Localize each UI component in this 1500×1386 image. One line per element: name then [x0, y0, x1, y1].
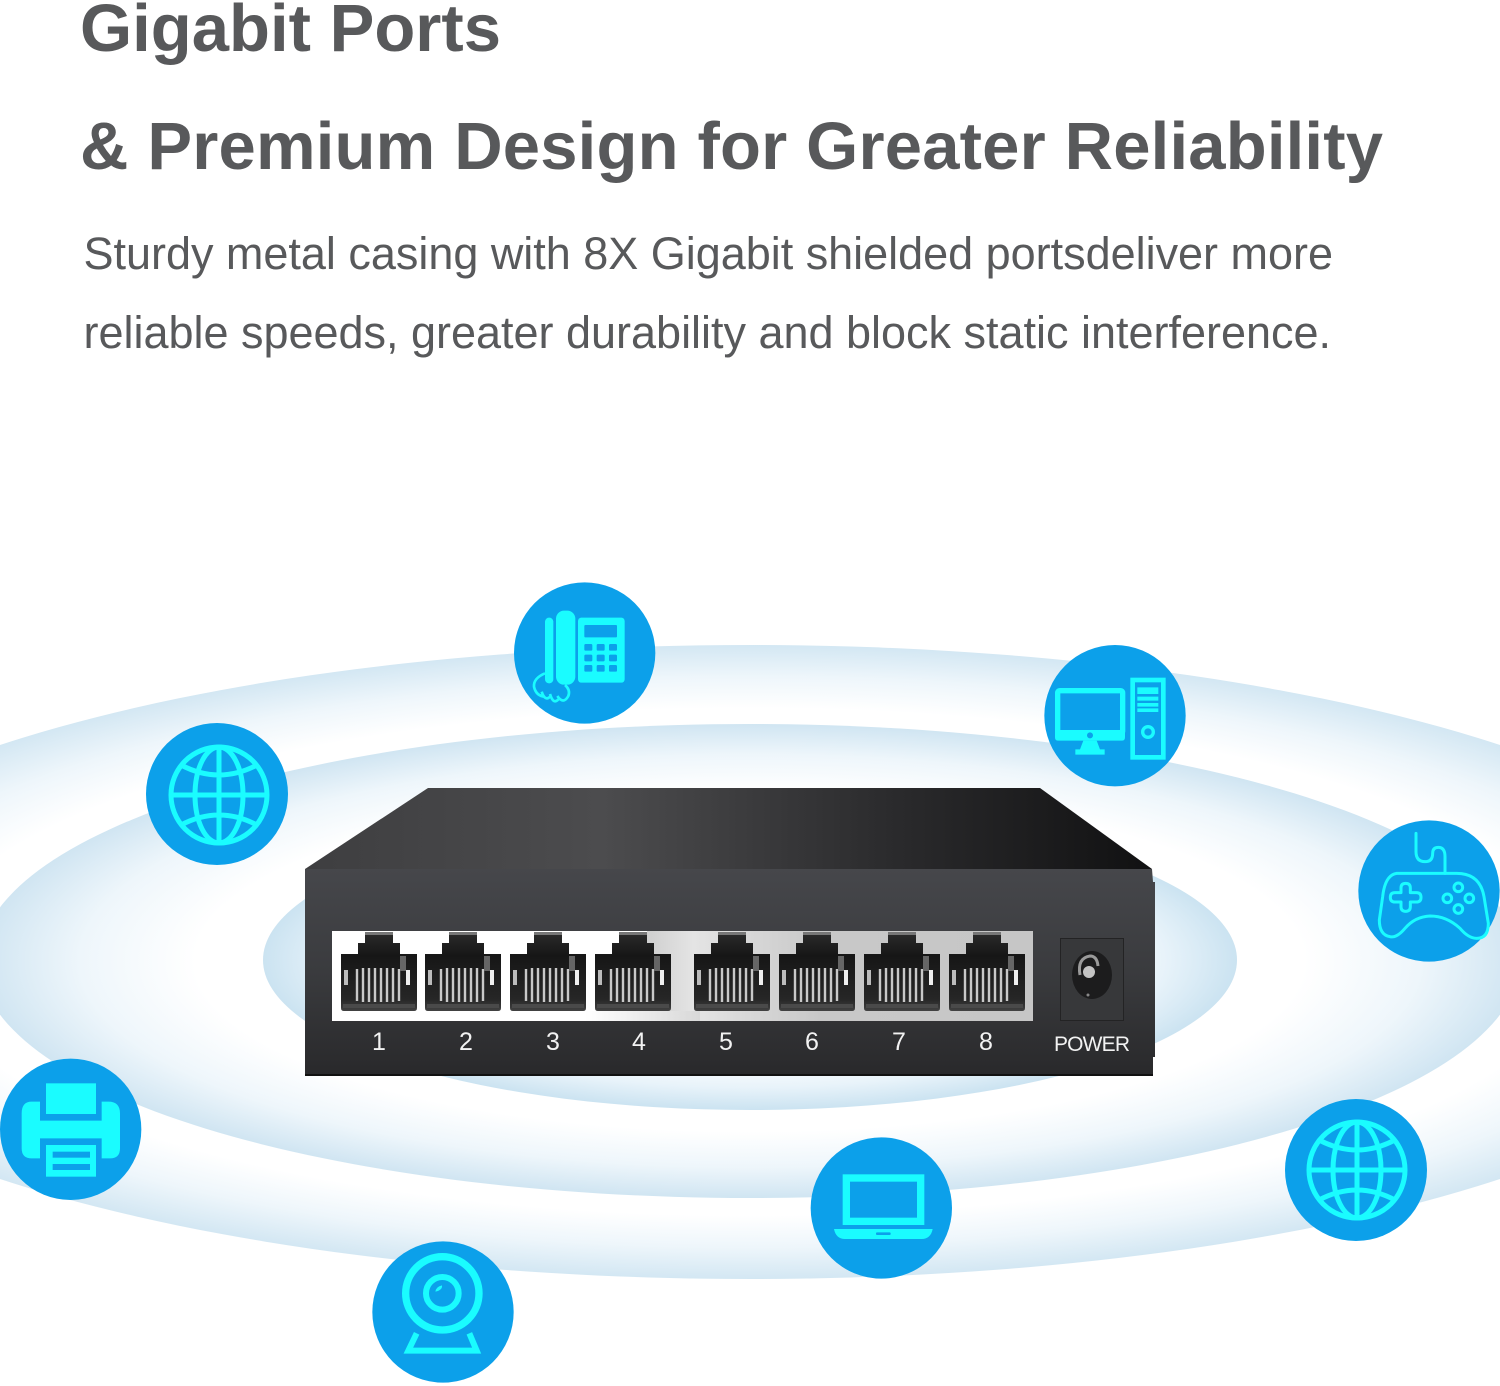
port strip — [332, 931, 1033, 1021]
switch front panel — [305, 869, 1155, 1075]
switch top panel — [305, 788, 1152, 869]
port numbers: 6 — [805, 1028, 819, 1056]
title: & Premium Design for Greater Reliability — [80, 109, 1383, 184]
network switch — [305, 788, 1155, 1076]
icon: game controller — [1358, 820, 1500, 962]
port numbers: 4 — [632, 1028, 646, 1056]
description text — [84, 228, 1333, 358]
icon: laptop — [811, 1137, 952, 1279]
icon: webcam — [372, 1241, 514, 1383]
icon: globe right — [1285, 1099, 1427, 1241]
port numbers: 5 — [719, 1028, 733, 1056]
port numbers: 7 — [892, 1028, 906, 1056]
icon: telephone — [514, 582, 655, 724]
port numbers: 8 — [979, 1028, 993, 1056]
icon: desktop computer — [1044, 645, 1186, 786]
port numbers: 1 — [372, 1028, 386, 1056]
ethernet ports — [341, 932, 1025, 1011]
description text: reliable speeds, greater durability and block static interference. — [84, 307, 1331, 358]
port numbers: 3 — [546, 1028, 560, 1056]
power label: POWER — [1054, 1033, 1130, 1056]
icon: globe left — [146, 723, 288, 865]
icon: printer — [0, 1059, 141, 1200]
port numbers: 2 — [459, 1028, 473, 1056]
power socket — [1060, 938, 1124, 1020]
port numbers — [372, 1028, 993, 1056]
description text: Sturdy metal casing with 8X Gigabit shielded portsdeliver more — [84, 228, 1333, 279]
title — [80, 0, 1383, 184]
signal ripple rings — [0, 645, 1500, 1279]
